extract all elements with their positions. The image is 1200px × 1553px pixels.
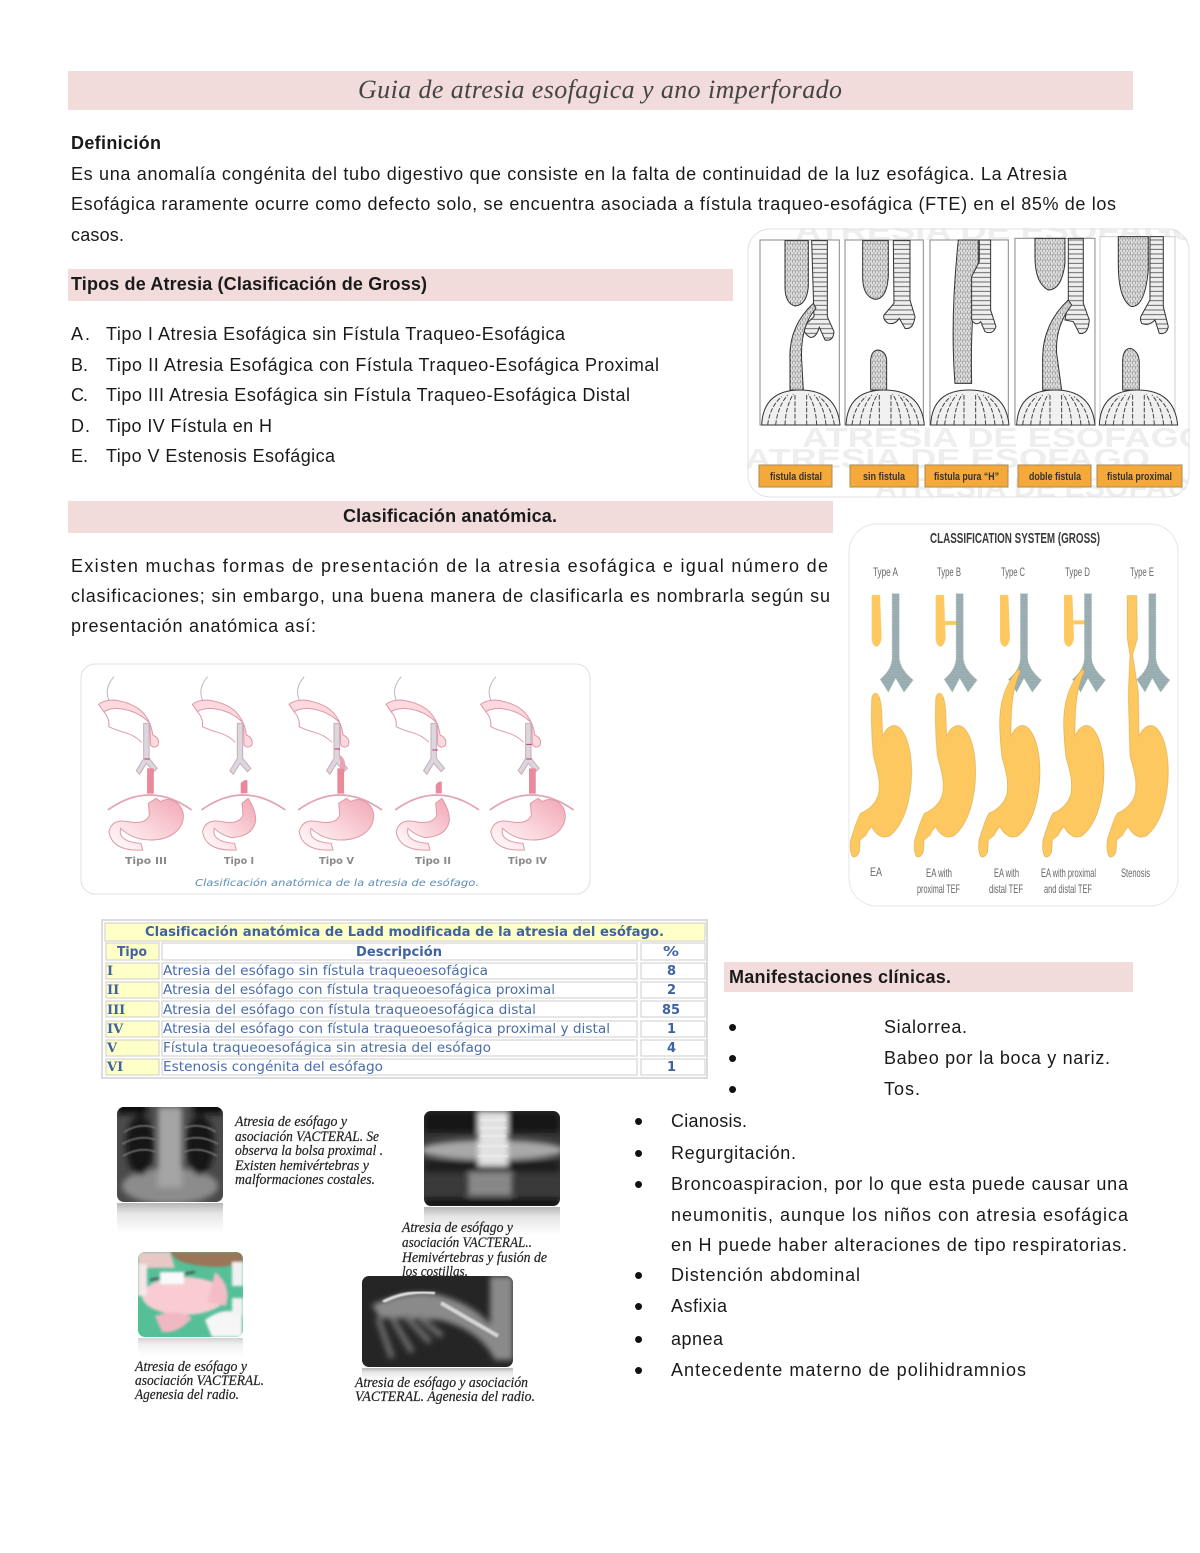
text block: definición: Esofágica raramente ocurre como defecto solo, se encuentra asociada a fístula traqueo-esofágica (FTE) en el 85% de los — [71, 194, 1116, 214]
text block: clasificación anatómica — [71, 556, 830, 636]
p2 — [863, 241, 888, 299]
list: manifestaciones clínicas: Antecedente materno de polihidramnios — [671, 1360, 1026, 1380]
caption: chest x-ray: Atresia de esófago y — [234, 1114, 348, 1130]
caption: chest x-ray: Existen hemivértebras y — [234, 1158, 370, 1174]
list: manifestaciones clínicas: • — [728, 1043, 737, 1073]
chart: classification system gross: Type D — [1065, 565, 1090, 579]
list: manifestaciones clínicas: • — [634, 1260, 643, 1290]
table rows: Estenosis congénita del esófago — [163, 1060, 383, 1075]
caption: chest x-ray: malformaciones costales. — [235, 1172, 375, 1188]
list: tipos de atresia: A. — [71, 324, 90, 344]
tipo I — [192, 677, 285, 850]
chart: classification system gross: and distal TEF — [1044, 882, 1092, 896]
list: tipos de atresia: B. — [71, 355, 88, 375]
table rows: Atresia del esófago sin fístula traqueoesofágica — [163, 964, 488, 979]
table header — [106, 943, 705, 960]
chart: classification system gross: Type C — [1001, 565, 1025, 579]
chart: classification system gross: Type A — [873, 565, 898, 579]
title — [68, 71, 1133, 110]
chart: classification system gross: proximal TEF — [917, 882, 960, 896]
caption: chest x-ray: observa la bolsa proximal . — [235, 1143, 383, 1159]
list: tipos de atresia: Tipo II Atresia Esofágica con Fístula Traqueo-Esofágica Proximal — [106, 355, 659, 375]
list: manifestaciones clínicas: • — [634, 1355, 643, 1385]
heading: clasificación anatómica — [68, 501, 833, 533]
heading: clasificación anatómica: Clasificación anatómica. — [343, 506, 557, 526]
table rows: 1 — [667, 1060, 676, 1075]
list: manifestaciones clínicas: Sialorrea. — [884, 1017, 967, 1037]
text block: clasificación anatómica: clasificaciones; sin embargo, una buena manera de clasificarla es nombrarla según su — [71, 586, 830, 606]
p3 — [953, 240, 978, 383]
list: manifestaciones clínicas: Distención abdominal — [671, 1265, 860, 1285]
list: tipos de atresia — [71, 324, 659, 466]
list: manifestaciones clínicas: • — [728, 1012, 737, 1042]
table rows: 8 — [667, 964, 676, 979]
list: tipos de atresia: D. — [71, 416, 90, 436]
list: tipos de atresia: Tipo III Atresia Esofágica sin Fístula Traqueo-Esofágica Distal — [106, 385, 630, 405]
text block: clasificación anatómica: Existen muchas formas de presentación de la atresia esofágica e igual número de — [71, 556, 828, 576]
table rows: 4 — [667, 1041, 676, 1056]
list: manifestaciones clínicas — [634, 1012, 1129, 1385]
table: clasificación de Ladd: Clasificación anatómica de Ladd modificada de la atresia del esófago. — [145, 925, 664, 940]
image: clasificación anatómica illustrations: Clasificación anatómica de la atresia de esófago. — [195, 877, 479, 889]
caption: spine x-ray — [401, 1220, 548, 1280]
list: tipos de atresia: Tipo IV Fístula en H — [106, 416, 272, 436]
chart title: CLASSIFICATION SYSTEM (GROSS) — [930, 530, 1100, 547]
labels of gross illustration: fistula proximal — [1107, 471, 1172, 483]
table rows: Atresia del esófago con fístula traqueoesofágica proximal — [163, 983, 555, 998]
table rows: 2 — [667, 983, 676, 998]
text block: definición — [71, 133, 1116, 245]
chart: classification system gross: Type E — [1130, 565, 1154, 579]
heading: tipos de atresia: Tipos de Atresia (Clasificación de Gross) — [71, 274, 427, 294]
caption: newborn photo: asociación VACTERAL. — [135, 1373, 264, 1389]
list: manifestaciones clínicas: en H puede haber alteraciones de tipo respiratorias. — [671, 1235, 1127, 1255]
list: tipos de atresia: Tipo I Atresia Esofágica sin Fístula Traqueo-Esofágica — [106, 324, 566, 344]
tipo IV — [481, 677, 574, 850]
list: manifestaciones clínicas: Broncoaspiracion, por lo que esta puede causar una — [671, 1174, 1129, 1194]
tipo III — [99, 677, 192, 810]
image: clasificación anatómica illustrations: Tipo V — [319, 856, 354, 867]
image: gross illustration panels: ATRESIA DE ESOFAGO — [745, 443, 1150, 474]
caption: spine x-ray: Atresia de esófago y — [401, 1220, 514, 1236]
image: gross illustration panels: ATRESIA DE ESOFAGO — [802, 422, 1200, 453]
table rows: V — [106, 1041, 118, 1056]
caption: newborn photo — [134, 1359, 264, 1403]
caption: spine x-ray: Hemivértebras y fusión de — [401, 1250, 548, 1266]
table header: Descripción — [356, 945, 442, 960]
caption: chest x-ray — [234, 1114, 383, 1188]
frame of gross illustration — [748, 229, 1189, 497]
E — [1137, 593, 1170, 692]
chart: classification system gross: EA — [870, 865, 882, 879]
table rows: III — [107, 1003, 125, 1018]
table rows: VI — [106, 1060, 123, 1075]
image: newborn photo — [138, 1252, 243, 1356]
table rows: I — [107, 964, 113, 979]
image: clasificación anatómica illustrations — [81, 664, 590, 894]
chart: classification system gross: EA with proximal — [1041, 866, 1096, 880]
chart: classification system gross: EA with — [994, 866, 1019, 880]
list: manifestaciones clínicas: • — [634, 1106, 643, 1136]
labels of gross illustration: doble fistula — [1029, 471, 1082, 483]
list: manifestaciones clínicas: • — [634, 1324, 643, 1354]
heading: manifestaciones clínicas — [724, 962, 1133, 992]
B — [936, 595, 946, 647]
table rows: 85 — [662, 1003, 680, 1018]
caption: spine x-ray: asociación VACTERAL.. — [402, 1235, 532, 1251]
list: manifestaciones clínicas: neumonitis, aunque los niños con atresia esofágica — [671, 1205, 1129, 1225]
list: manifestaciones clínicas: • — [728, 1074, 737, 1104]
caption: newborn photo: Agenesia del radio. — [134, 1387, 239, 1403]
C — [1000, 595, 1010, 647]
image: clasificación anatómica illustrations: Tipo I — [224, 856, 254, 867]
D — [1064, 595, 1074, 647]
chart: classification system gross: Stenosis — [1121, 866, 1150, 880]
caption: arm x-ray: Atresia de esófago y asociación — [354, 1375, 528, 1391]
table header: % — [663, 945, 679, 960]
text block: definición: Es una anomalía congénita del tubo digestivo que consiste en la falta de continuidad de la luz esofágica. La Atresia — [71, 164, 1068, 184]
heading: tipos de atresia — [68, 269, 733, 301]
image: chest x-ray — [117, 1107, 223, 1226]
text block: clasificación anatómica: presentación anatómica así: — [71, 616, 316, 636]
table rows: II — [107, 983, 119, 998]
tipo V — [289, 677, 382, 850]
text block: definición: casos. — [71, 225, 124, 245]
title: Guia de atresia esofagica y ano imperforado — [358, 75, 842, 104]
list: tipos de atresia: E. — [71, 446, 88, 466]
list: tipos de atresia: C. — [71, 385, 88, 405]
image: clasificación anatómica illustrations: Tipo IV — [508, 856, 547, 867]
heading: manifestaciones clínicas: Manifestaciones clínicas. — [729, 967, 951, 987]
labels of gross illustration — [759, 465, 1182, 487]
table rows: Atresia del esófago con fístula traqueoesofágica proximal y distal — [163, 1022, 610, 1037]
list: manifestaciones clínicas: Asfixia — [671, 1296, 728, 1316]
image: clasificación anatómica illustrations: Tipo II — [415, 856, 451, 867]
p5 — [1118, 237, 1148, 307]
image: clasificación anatómica illustrations: Tipo III — [125, 856, 167, 867]
list: tipos de atresia: Tipo V Estenosis Esofágica — [106, 446, 336, 466]
caption: arm x-ray: VACTERAL. Agenesia del radio. — [355, 1389, 535, 1405]
table rows — [106, 963, 705, 1075]
list: manifestaciones clínicas: • — [634, 1169, 643, 1199]
chart: classification system gross — [849, 524, 1178, 906]
chart: classification system gross: Type B — [937, 565, 961, 579]
caption: arm x-ray — [354, 1375, 535, 1405]
caption: chest x-ray: asociación VACTERAL. Se — [235, 1129, 380, 1145]
caption: newborn photo: Atresia de esófago y — [134, 1359, 248, 1375]
image: spine x-ray — [424, 1111, 560, 1229]
table rows: Fístula traqueoesofágica sin atresia del esófago — [163, 1041, 491, 1056]
text block: definición: Definición — [71, 133, 161, 153]
labels of gross illustration: fistula pura “H” — [934, 471, 999, 483]
caption: spine x-ray: los costillas. — [402, 1264, 468, 1280]
chart: classification system gross: distal TEF — [989, 882, 1023, 896]
list: manifestaciones clínicas: Babeo por la boca y nariz. — [884, 1048, 1110, 1068]
list: manifestaciones clínicas: Tos. — [884, 1079, 920, 1099]
list: manifestaciones clínicas: • — [634, 1138, 643, 1168]
list: manifestaciones clínicas: • — [634, 1291, 643, 1321]
list: manifestaciones clínicas: apnea — [671, 1329, 724, 1349]
table rows: IV — [107, 1022, 124, 1037]
list: manifestaciones clínicas: Cianosis. — [671, 1111, 747, 1131]
p1 — [785, 241, 808, 306]
table header: Tipo — [117, 945, 147, 960]
image: gross illustration panels — [745, 215, 1200, 503]
p4 — [1035, 238, 1065, 290]
image: gross illustration panels: ATRESIA DE ESOFAGO — [875, 472, 1200, 503]
image: arm x-ray — [362, 1276, 513, 1380]
table rows: Atresia del esófago con fístula traqueoesofágica distal — [163, 1003, 536, 1018]
labels of gross illustration: fistula distal — [770, 471, 822, 483]
labels of gross illustration: sin fistula — [863, 471, 906, 483]
tipo II — [386, 677, 479, 850]
list: manifestaciones clínicas: Regurgitación. — [671, 1143, 796, 1163]
chart: classification system gross: EA with — [926, 866, 952, 880]
image: gross illustration panels: ATRESIA DE ESOFAGO — [795, 215, 1200, 246]
A — [872, 595, 882, 647]
table rows: 1 — [667, 1022, 676, 1037]
table: clasificación de Ladd — [102, 920, 707, 1078]
